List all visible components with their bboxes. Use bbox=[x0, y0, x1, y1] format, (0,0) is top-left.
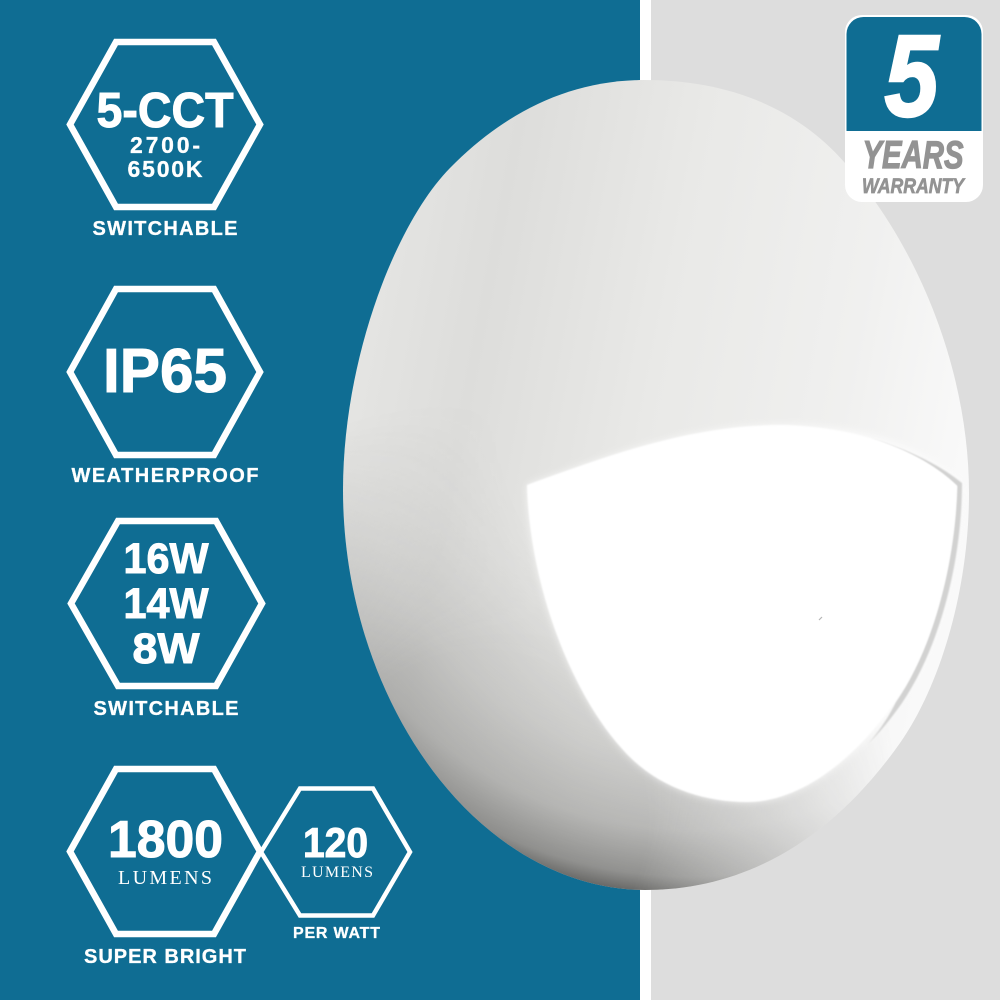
feature: 1800 lumens bbox=[70, 769, 260, 968]
lens rim shadow bbox=[868, 438, 962, 744]
lens bbox=[527, 425, 957, 802]
value: 5-CCT bbox=[96, 84, 234, 138]
warranty: WARRANTY bbox=[862, 175, 966, 198]
unit: LUMENS bbox=[118, 867, 212, 889]
hexagon bbox=[261, 788, 410, 916]
feature: wattage bbox=[71, 521, 262, 720]
badge background bbox=[845, 15, 983, 202]
years: YEARS bbox=[862, 134, 964, 177]
unit: LUMENS bbox=[301, 864, 373, 881]
feature: 5-CCT: 6500K bbox=[128, 156, 203, 182]
lens speck bbox=[819, 617, 822, 620]
value: 1800 bbox=[108, 811, 223, 869]
product: round LED wall light bbox=[335, 75, 975, 895]
caption: SUPER BRIGHT bbox=[84, 946, 246, 968]
feature: wattage: 8W bbox=[132, 625, 200, 673]
badge blue header bbox=[846, 17, 982, 131]
hexagon bbox=[70, 769, 260, 934]
shell underside shading bbox=[343, 484, 864, 890]
background: grey panel bbox=[651, 0, 1000, 1000]
value: 120 bbox=[303, 819, 368, 866]
light shell bbox=[343, 80, 969, 890]
feature: wattage: 14W bbox=[124, 580, 209, 628]
numeral: 5 bbox=[884, 11, 940, 141]
caption: SWITCHABLE bbox=[92, 218, 238, 240]
hexagon bbox=[70, 289, 260, 455]
lens glow bbox=[527, 425, 960, 802]
range: 2700- bbox=[130, 132, 200, 158]
background: blue panel bbox=[0, 0, 640, 1000]
feature: 120 lumens per watt bbox=[261, 788, 410, 942]
hexagon bbox=[71, 521, 262, 686]
caption: WEATHERPROOF bbox=[72, 465, 258, 487]
background: white stripe bbox=[640, 0, 651, 1000]
badge: 5 years warranty bbox=[845, 11, 983, 202]
caption: PER WATT bbox=[293, 925, 380, 942]
hexagon bbox=[70, 42, 260, 207]
value: IP65 bbox=[103, 337, 227, 406]
feature: IP65 bbox=[70, 289, 260, 487]
feature: 5-CCT bbox=[70, 42, 260, 240]
caption: SWITCHABLE bbox=[94, 698, 238, 720]
values: 16W bbox=[124, 535, 209, 583]
